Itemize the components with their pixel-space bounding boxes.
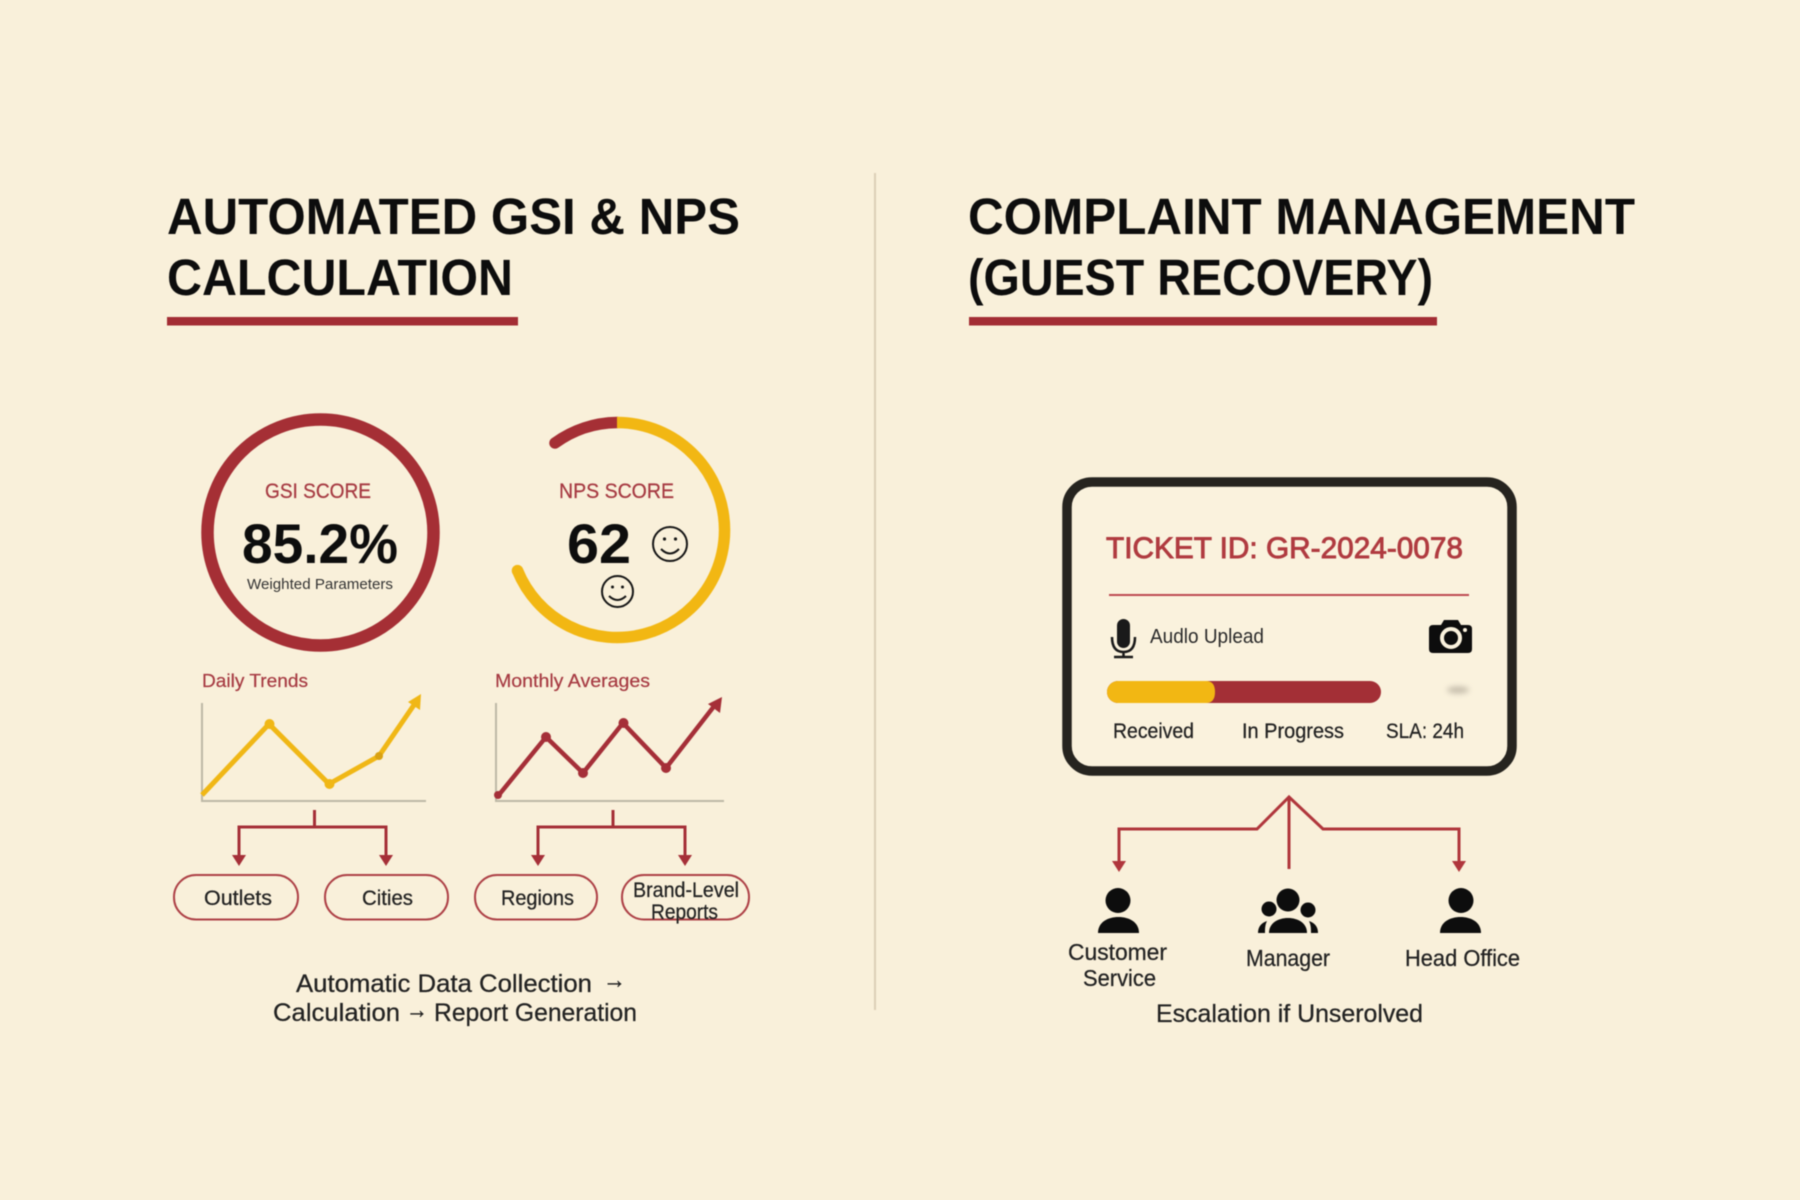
pill: brand-level reports (622, 875, 749, 924)
icon: customer service person (1098, 888, 1139, 933)
chart: monthly averages (494, 671, 724, 801)
icon: smiley bottom (602, 576, 633, 607)
label: SLA: SLA: 24h (1386, 720, 1464, 743)
card: ticket: Audlo Uplead (1150, 626, 1264, 648)
arrows: regions and brand-level branch (531, 810, 692, 866)
heading: GSI and NPS: AUTOMATED GSI & NPS (167, 188, 740, 245)
label: customer service: Customer (1068, 939, 1167, 965)
pill: cities (325, 875, 448, 920)
icon: manager group (1258, 888, 1318, 933)
progress bar (1107, 681, 1469, 703)
panel: complaint management (968, 188, 1635, 1028)
pill: cities: Cities (362, 887, 413, 910)
gauge: NPS score: NPS SCORE (559, 480, 674, 503)
pill: outlets (174, 875, 298, 920)
gauge: GSI score: 85.2% (242, 512, 398, 575)
label: customer service: Service (1083, 965, 1156, 991)
heading: complaint management (968, 188, 1635, 326)
label: received: Received (1113, 720, 1194, 743)
caption: data flow: → (406, 996, 428, 1024)
label: customer service (1068, 939, 1167, 991)
caption: data flow: Automatic Data Collection (296, 970, 592, 998)
heading: complaint management: (GUEST RECOVERY) (968, 249, 1433, 306)
arrows: escalation branch (1112, 797, 1466, 872)
heading: GSI and NPS: CALCULATION (167, 249, 513, 306)
caption: data flow: Report Generation (434, 999, 637, 1027)
chart: daily trends (202, 671, 426, 801)
card: ticket (1067, 482, 1512, 771)
heading: GSI and NPS (167, 188, 740, 326)
label: manager: Manager (1246, 945, 1330, 971)
label: head office: Head Office (1405, 945, 1520, 971)
icon: microphone (1112, 619, 1135, 657)
pill: regions: Regions (501, 887, 574, 910)
caption: escalation: Escalation if Unserolved (1156, 1000, 1423, 1028)
gauge: GSI score (208, 420, 434, 646)
pill: brand-level reports: Reports (651, 901, 718, 924)
heading: complaint management: COMPLAINT MANAGEMENT (968, 188, 1635, 245)
gauge: GSI score: GSI SCORE (265, 480, 371, 503)
icon: camera (1429, 620, 1472, 653)
label: in progress: In Progress (1242, 720, 1344, 743)
chart: daily trends: Daily Trends (202, 671, 308, 691)
arrows: outlets and cities branch (232, 810, 393, 866)
chart: monthly averages: Monthly Averages (495, 671, 650, 691)
caption: data flow: Calculation (273, 999, 400, 1027)
pill: outlets: Outlets (204, 887, 272, 910)
icon: smiley right (653, 527, 687, 561)
gauge: NPS score: 62 (567, 512, 631, 575)
icon: head office person (1440, 888, 1481, 933)
gauge: NPS score (512, 422, 725, 638)
gauge: GSI score: Weighted Parameters (247, 576, 393, 593)
panel: automated GSI and NPS calculation (167, 188, 749, 1027)
pill: regions (475, 875, 597, 920)
caption: data flow (273, 966, 637, 1027)
card: ticket: TICKET ID: GR-2024-0078 (1106, 532, 1463, 565)
pill: brand-level reports: Brand-Level (633, 879, 739, 902)
caption: data flow: → (603, 966, 626, 994)
